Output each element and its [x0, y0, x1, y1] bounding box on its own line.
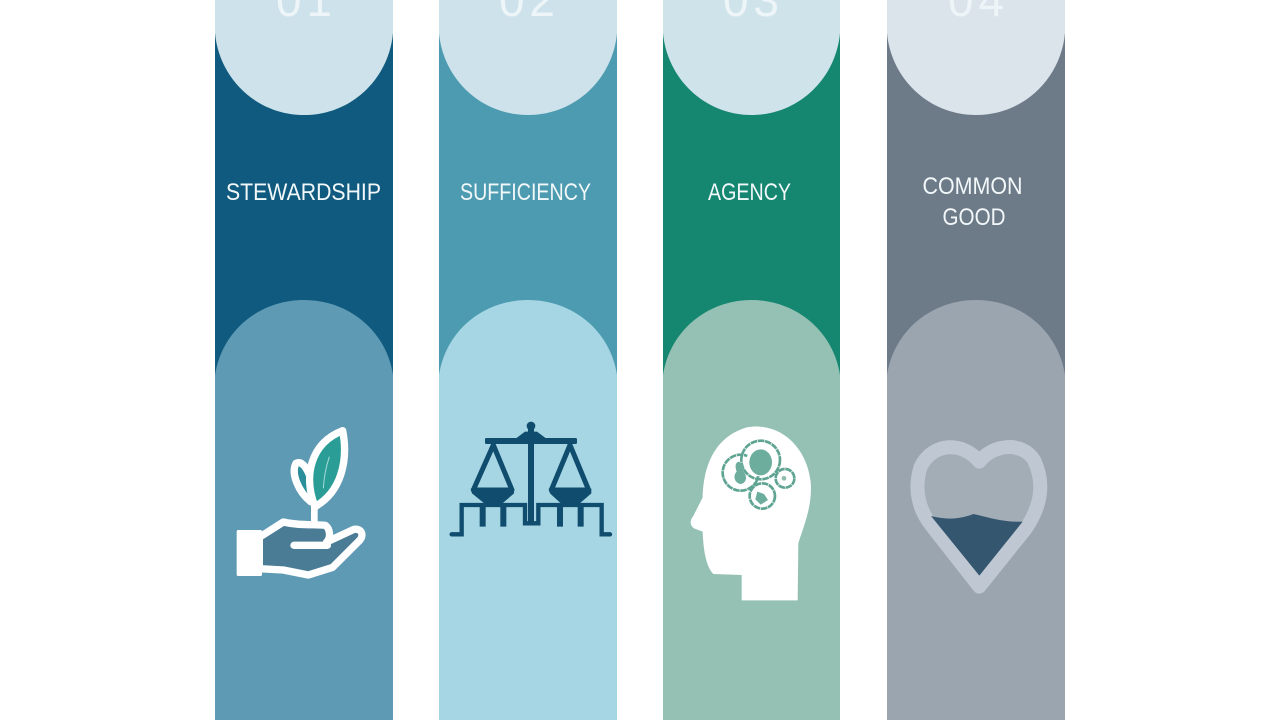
- number circle 02: [439, 0, 617, 115]
- heading: sufficiency: SUFFICIENCY: [460, 179, 591, 206]
- lower arch panel: [215, 300, 393, 720]
- panel: 01 stewardship: [215, 0, 393, 720]
- lower arch panel: [439, 300, 617, 720]
- icon: balance scales: [452, 422, 610, 534]
- heading: agency: AGENCY: [708, 179, 791, 206]
- icon: half-filled heart: [917, 447, 1040, 587]
- lower arch panel: [663, 300, 840, 720]
- panel: 03 agency: [663, 0, 840, 720]
- heading: common good: [922, 173, 1022, 231]
- number circle 01: [215, 0, 393, 115]
- panel: 02 sufficiency: [439, 0, 617, 720]
- number circle 04: [887, 0, 1065, 115]
- panel: 04 common good: [887, 0, 1065, 720]
- icon: hand holding seedling: [237, 431, 362, 576]
- number circle 03: [663, 0, 840, 115]
- heading: stewardship: STEWARDSHIP: [226, 179, 381, 206]
- icon: head with gears: [691, 427, 811, 600]
- heading: common good: COMMON: [922, 173, 1022, 200]
- heading: common good: GOOD: [942, 204, 1006, 231]
- lower arch panel: [887, 300, 1065, 720]
